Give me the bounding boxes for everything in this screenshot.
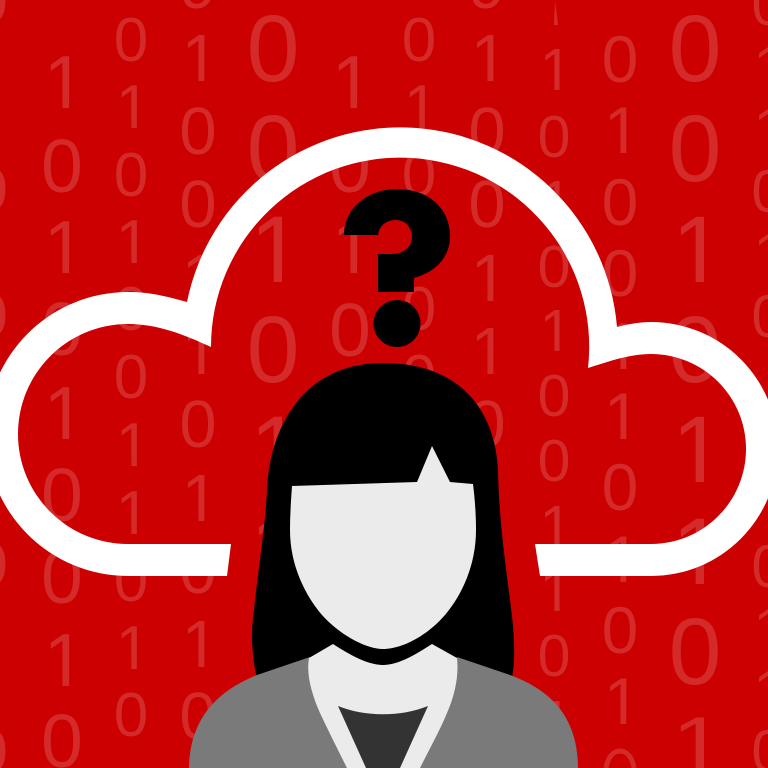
binary digit pattern: 1 (116, 208, 150, 277)
binary digit pattern: 0 (41, 124, 83, 208)
binary digit pattern: 1 (182, 461, 219, 536)
binary digit pattern: 0 (538, 363, 570, 429)
binary digit pattern: 0 (669, 599, 721, 705)
binary digit pattern: 1 (604, 93, 641, 167)
binary digit pattern: 0 (114, 6, 148, 75)
binary digit pattern: 1 (44, 371, 85, 455)
binary digit pattern: 1 (44, 205, 85, 289)
binary digit pattern: 1 (250, 197, 303, 303)
binary digit pattern: 1 (540, 689, 572, 755)
neck and collar (308, 644, 458, 768)
binary digit pattern: 1 (540, 558, 572, 624)
binary digit pattern: 1 (404, 73, 438, 142)
binary digit pattern: 1 (540, 298, 572, 364)
binary digit pattern: 0 (179, 533, 217, 608)
binary digit pattern: 1 (182, 21, 219, 96)
binary digit pattern: 0 (468, 94, 506, 169)
binary digit pattern: 0 (179, 94, 217, 169)
binary digit pattern: 0 (468, 387, 506, 462)
binary digit pattern: 0 (41, 453, 83, 537)
icon: faceless woman (189, 363, 578, 768)
binary digit pattern: 1 (540, 494, 572, 560)
binary digit pattern: 0 (179, 387, 217, 462)
hair (252, 363, 514, 690)
binary digit pattern: 0 (538, 623, 570, 689)
binary digit pattern: 0 (402, 343, 436, 412)
dark blouse (338, 706, 428, 768)
binary digit pattern: 1 (540, 169, 572, 235)
binary digit pattern: 1 (672, 197, 725, 303)
binary digit pattern: 1 (116, 479, 150, 548)
binary digit pattern: 0 (179, 167, 217, 242)
binary digit pattern: 0 (602, 165, 638, 239)
binary digit pattern: 0 (114, 546, 148, 615)
binary digit pattern: 0 (329, 288, 371, 372)
binary digit pattern: 1 (116, 411, 150, 480)
binary digit pattern: 1 (182, 241, 219, 316)
binary digit pattern: 0 (114, 343, 148, 412)
binary digit pattern: 0 (41, 287, 83, 371)
binary digit pattern: 0 (669, 297, 721, 403)
binary digit pattern: 0 (247, 96, 299, 202)
binary digit pattern: 1 (250, 497, 303, 603)
binary digit pattern: 0 (669, 96, 721, 202)
binary digit pattern: 0 (402, 275, 436, 344)
binary digit pattern: 0 (114, 681, 148, 750)
binary digit pattern: 1 (604, 379, 641, 453)
jacket shoulders (189, 657, 578, 768)
binary digit pattern: 1 (332, 40, 373, 124)
binary digit pattern: 1 (44, 40, 85, 124)
binary digit pattern: 1 (540, 37, 572, 103)
binary digit pattern: 0 (179, 679, 217, 754)
binary digit pattern: 1 (182, 314, 219, 389)
binary digit pattern: 1 (672, 397, 725, 503)
binary digit pattern: 0 (247, 297, 299, 403)
binary digit pattern: 0 (402, 6, 436, 75)
binary digit pattern: 0 (468, 167, 506, 242)
binary digit pattern: 1 (44, 618, 85, 702)
binary digit pattern: 0 (602, 22, 638, 96)
binary digit pattern: 0 (402, 141, 436, 210)
binary digit pattern: 1 (116, 73, 150, 142)
icon: cloud outline (0, 127, 768, 576)
binary digit pattern: 0 (538, 104, 570, 170)
face (290, 446, 476, 649)
binary digit pattern: 0 (602, 236, 638, 310)
binary digit pattern: 1 (471, 21, 508, 96)
binary digit pattern: 0 (41, 535, 83, 619)
binary digit pattern: 0 (114, 141, 148, 210)
binary digit pattern: 1 (182, 607, 219, 682)
binary digit pattern: 1 (250, 397, 303, 503)
binary digit pattern: 0 (329, 124, 371, 208)
binary digit pattern: 1 (471, 314, 508, 389)
binary digit pattern: 0 (538, 428, 570, 494)
binary digit pattern: 0 (114, 275, 148, 344)
binary digit pattern: 1 (332, 205, 373, 289)
binary digit pattern: 1 (604, 309, 641, 383)
binary digit pattern: 1 (604, 522, 641, 596)
icon: question mark (344, 189, 450, 347)
binary digit pattern: 1 (471, 241, 508, 316)
binary digit pattern: 0 (602, 450, 638, 524)
binary digit pattern: 0 (538, 234, 570, 300)
binary digit pattern: 0 (602, 593, 638, 667)
binary digit pattern: 1 (604, 664, 641, 738)
binary digit pattern: 1 (116, 614, 150, 683)
binary digit pattern: 1 (672, 499, 725, 605)
